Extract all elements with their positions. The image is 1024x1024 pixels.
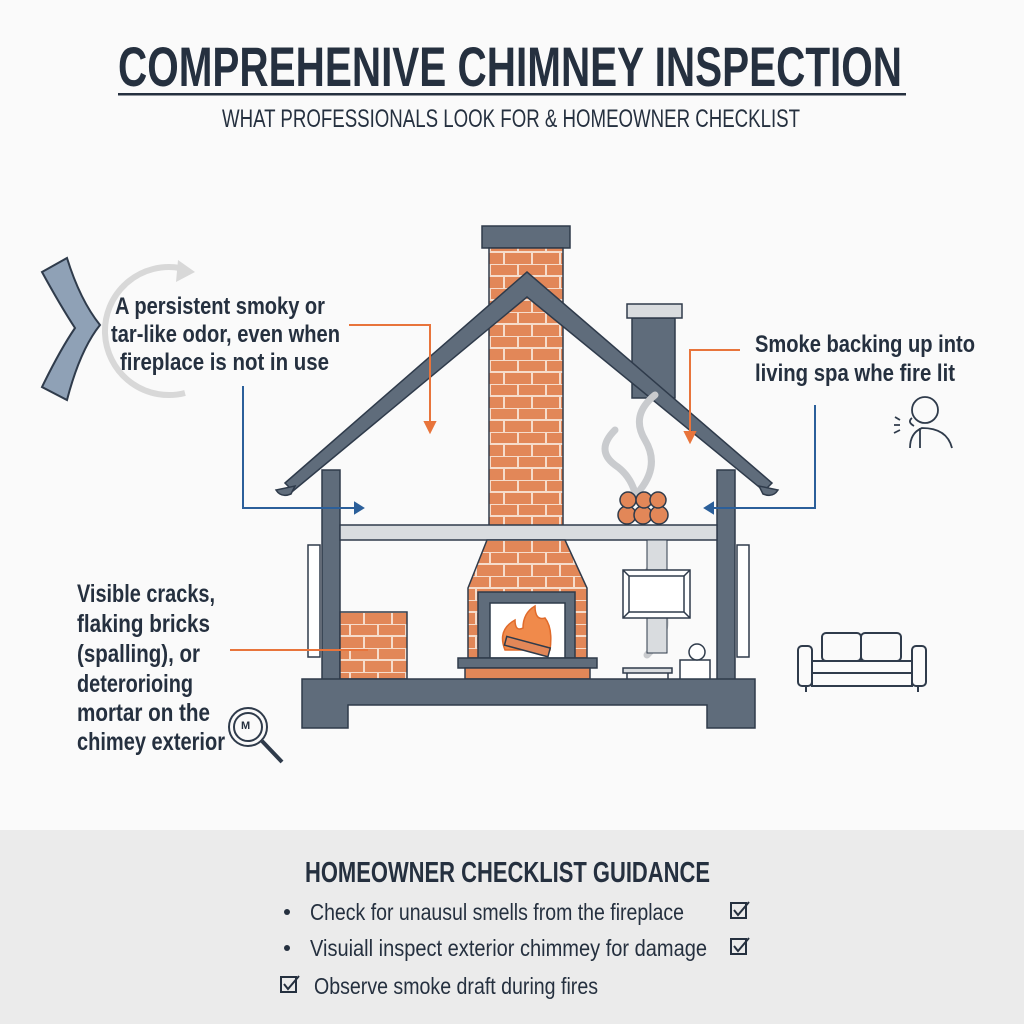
icon: coughing person xyxy=(894,397,952,448)
arrow: smoke to roof xyxy=(685,350,740,442)
icon: sofa xyxy=(798,633,926,692)
arrow: blue right xyxy=(705,405,815,513)
walls xyxy=(322,470,340,680)
icon: magnifier: M xyxy=(241,720,250,732)
floor beam xyxy=(340,525,717,540)
fireplace xyxy=(458,540,597,679)
text: odor callout: fireplace is not in use xyxy=(120,349,329,376)
arrow: odor to chimney xyxy=(349,325,435,432)
text: smoke callout: living spa whe fire lit xyxy=(755,360,955,387)
roof xyxy=(285,272,772,491)
panel: homeowner checklist xyxy=(0,830,1024,1024)
checklist item 1: Check for unausul smells from the fireplace xyxy=(310,899,684,925)
text: cracks callout: Visible cracks, xyxy=(77,580,215,608)
house illustration xyxy=(276,226,778,728)
text: cracks callout: (spalling), or xyxy=(77,640,200,668)
subtitle: WHAT PROFESSIONALS LOOK FOR & HOMEOWNER CHECKLIST xyxy=(222,105,800,133)
firewood logs xyxy=(618,492,668,524)
pot xyxy=(680,644,710,688)
text: odor callout: A persistent smoky or xyxy=(115,293,325,320)
checklist heading: HOMEOWNER CHECKLIST GUIDANCE xyxy=(305,857,710,889)
text: smoke callout: Smoke backing up into xyxy=(755,331,975,358)
pipe below floor xyxy=(647,540,667,653)
text: cracks callout xyxy=(77,580,225,756)
text: cracks callout: chimey exterior xyxy=(77,728,225,756)
text: cracks callout: mortar on the xyxy=(77,699,210,727)
arrow: blue left xyxy=(243,386,363,513)
icon: odor chevron with arc xyxy=(42,258,195,400)
gutters xyxy=(276,486,778,495)
text: odor callout: tar-like odor, even when xyxy=(111,321,340,348)
smoke xyxy=(605,395,665,655)
stovepipe xyxy=(627,304,682,398)
text: cracks callout: flaking bricks xyxy=(77,610,210,638)
window xyxy=(623,570,690,618)
text: smoke callout xyxy=(755,331,975,387)
slab xyxy=(302,679,755,728)
left brick stack xyxy=(340,612,407,679)
table xyxy=(623,668,672,680)
text: odor callout xyxy=(111,293,340,376)
checklist item 3: Observe smoke draft during fires xyxy=(314,973,598,999)
icon: magnifier xyxy=(229,708,282,762)
arrow: cracks line xyxy=(230,649,368,651)
checklist item 2: Visuiall inspect exterior chimmey for damage xyxy=(310,935,707,961)
text: cracks callout: deterorioing xyxy=(77,670,193,698)
chimney stack xyxy=(482,226,570,526)
